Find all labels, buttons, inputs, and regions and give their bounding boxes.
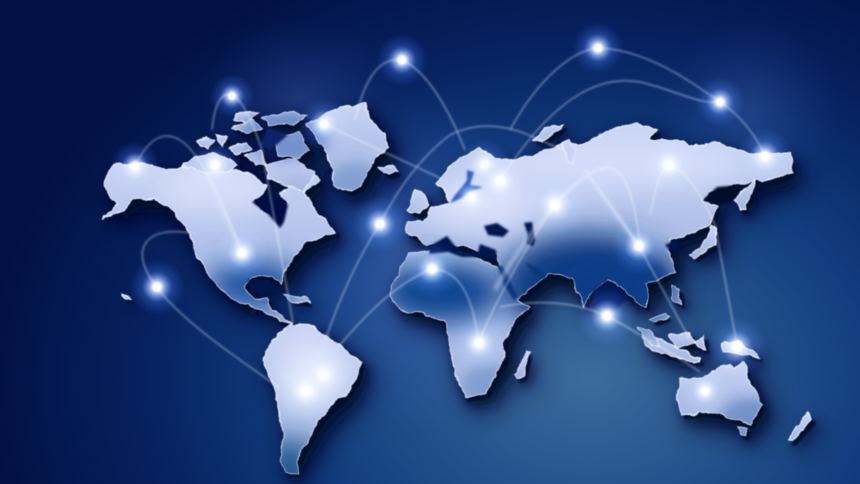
dark shading: south asia <box>602 254 676 304</box>
arc: asia crossing <box>585 170 690 340</box>
dark shading: southern usa and mexico <box>207 261 303 309</box>
dark shading: greenland <box>332 158 382 191</box>
arc: arctic node <box>212 94 293 323</box>
arc: atlantic node <box>327 126 563 335</box>
arc glow <box>205 168 639 391</box>
dark shading: arctic islands <box>240 109 330 161</box>
arc: greenland node <box>355 60 465 150</box>
light wash: south america <box>276 341 348 409</box>
dark shading: south america tip <box>280 418 316 474</box>
dark shading: australia <box>716 392 762 436</box>
arc: top long arc <box>510 48 765 155</box>
arc: alaska node <box>135 136 242 253</box>
arc: europe link <box>324 124 440 178</box>
arc: east asia loops <box>650 165 737 345</box>
network nodes <box>110 22 793 421</box>
light wash: north america <box>155 164 275 216</box>
continent shading <box>155 109 780 484</box>
inland seas <box>248 128 740 310</box>
light wash: north asia <box>490 139 750 191</box>
connection arcs <box>135 48 765 388</box>
arc: pacific node <box>142 232 280 388</box>
arc: africa to europe <box>478 168 640 343</box>
background haze <box>200 20 840 430</box>
land cast shadow <box>105 107 823 484</box>
continents <box>102 103 813 473</box>
light wash: europe <box>420 179 540 231</box>
arc: indian ocean <box>500 303 700 372</box>
dark shading: central asia <box>500 233 680 337</box>
arc: second top arc <box>500 81 720 180</box>
arc: atlantic to africa <box>340 269 478 345</box>
dark shading: southern africa <box>462 365 518 405</box>
dark shading: north africa <box>378 260 502 324</box>
